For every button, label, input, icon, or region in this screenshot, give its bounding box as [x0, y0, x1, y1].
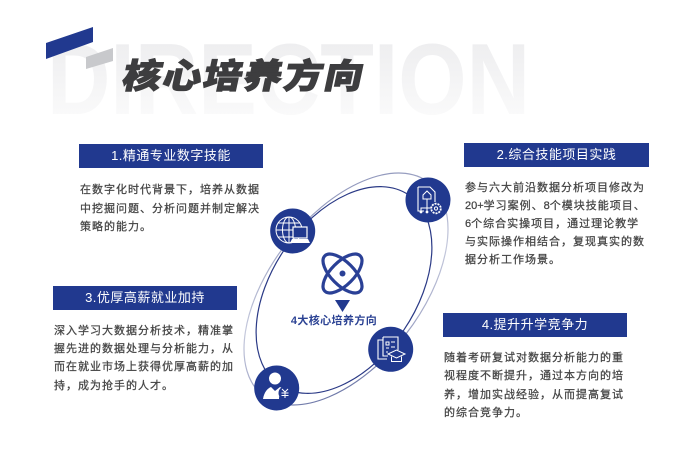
text 2: 据分析工作场景。 [465, 254, 561, 266]
panel: skill 3 [53, 286, 237, 392]
arrow: down triangle [335, 300, 350, 312]
panel: skill 1 [79, 144, 263, 233]
orbit: outer ring [204, 136, 488, 442]
watermark: DIRECTION: DIRECTION [47, 24, 530, 136]
text 3 [54, 324, 234, 392]
orbit: inner ring [220, 154, 468, 426]
text 2: 20+学习案例、8个模块技能项目、 [465, 200, 646, 212]
heading 2: 2.综合技能项目实践 [497, 147, 616, 162]
heading 4: 4.提升升学竞争力 [482, 317, 588, 332]
text 4: 视程度不断提升，通过本方向的培 [444, 370, 624, 382]
heading 1: 1.精通专业数字技能 [111, 148, 231, 163]
heading 1 [79, 144, 263, 168]
title accent: blue parallelogram [46, 27, 93, 59]
icon: globe and laptop [270, 208, 315, 254]
text 3: 深入学习大数据分析技术，精准掌 [54, 325, 234, 337]
text 1: 中挖掘问题、分析问题并制定解决 [80, 202, 260, 214]
panel: skill 2 [464, 143, 649, 266]
text 2: 与实际操作相结合，复现真实的数 [465, 236, 645, 248]
text 1: 在数字化时代背景下，培养从数据 [80, 184, 260, 196]
text 4 [444, 352, 624, 419]
text 3: 持，成为抢手的人才。 [54, 380, 174, 392]
title: 核心培养方向 [119, 58, 369, 96]
panel: skill 4 [443, 313, 627, 419]
text 4: 的综合竞争力。 [444, 407, 528, 419]
text 2: 6个综合实操项目，通过理论教学 [465, 218, 639, 230]
heading 2 [464, 143, 649, 167]
title accent: gray parallelogram [86, 48, 113, 69]
text 3: 而在就业市场上获得优厚高薪的加 [54, 361, 234, 373]
heading 3: 3.优厚高薪就业加持 [85, 290, 205, 305]
text 4: 随着考研复试对数据分析能力的重 [444, 352, 624, 364]
text 3: 握先进的数据处理与分析能力，从 [54, 343, 234, 355]
text 1 [80, 184, 260, 233]
icon: document with flow and gear [406, 178, 450, 222]
text 2 [465, 182, 646, 266]
center label: 4大核心培养方向 [291, 315, 377, 327]
text 4: 养，增加实战经验，从而提高复试 [444, 389, 624, 401]
text 2: 参与六大前沿数据分析项目修改为 [465, 182, 645, 194]
heading 4 [443, 313, 627, 337]
icon: central atom [317, 248, 368, 299]
icon: person with yuan coin [254, 366, 299, 410]
text 1: 策略的能力。 [80, 221, 152, 233]
icon: document and graduation cap [368, 327, 413, 372]
heading 3 [53, 286, 237, 310]
